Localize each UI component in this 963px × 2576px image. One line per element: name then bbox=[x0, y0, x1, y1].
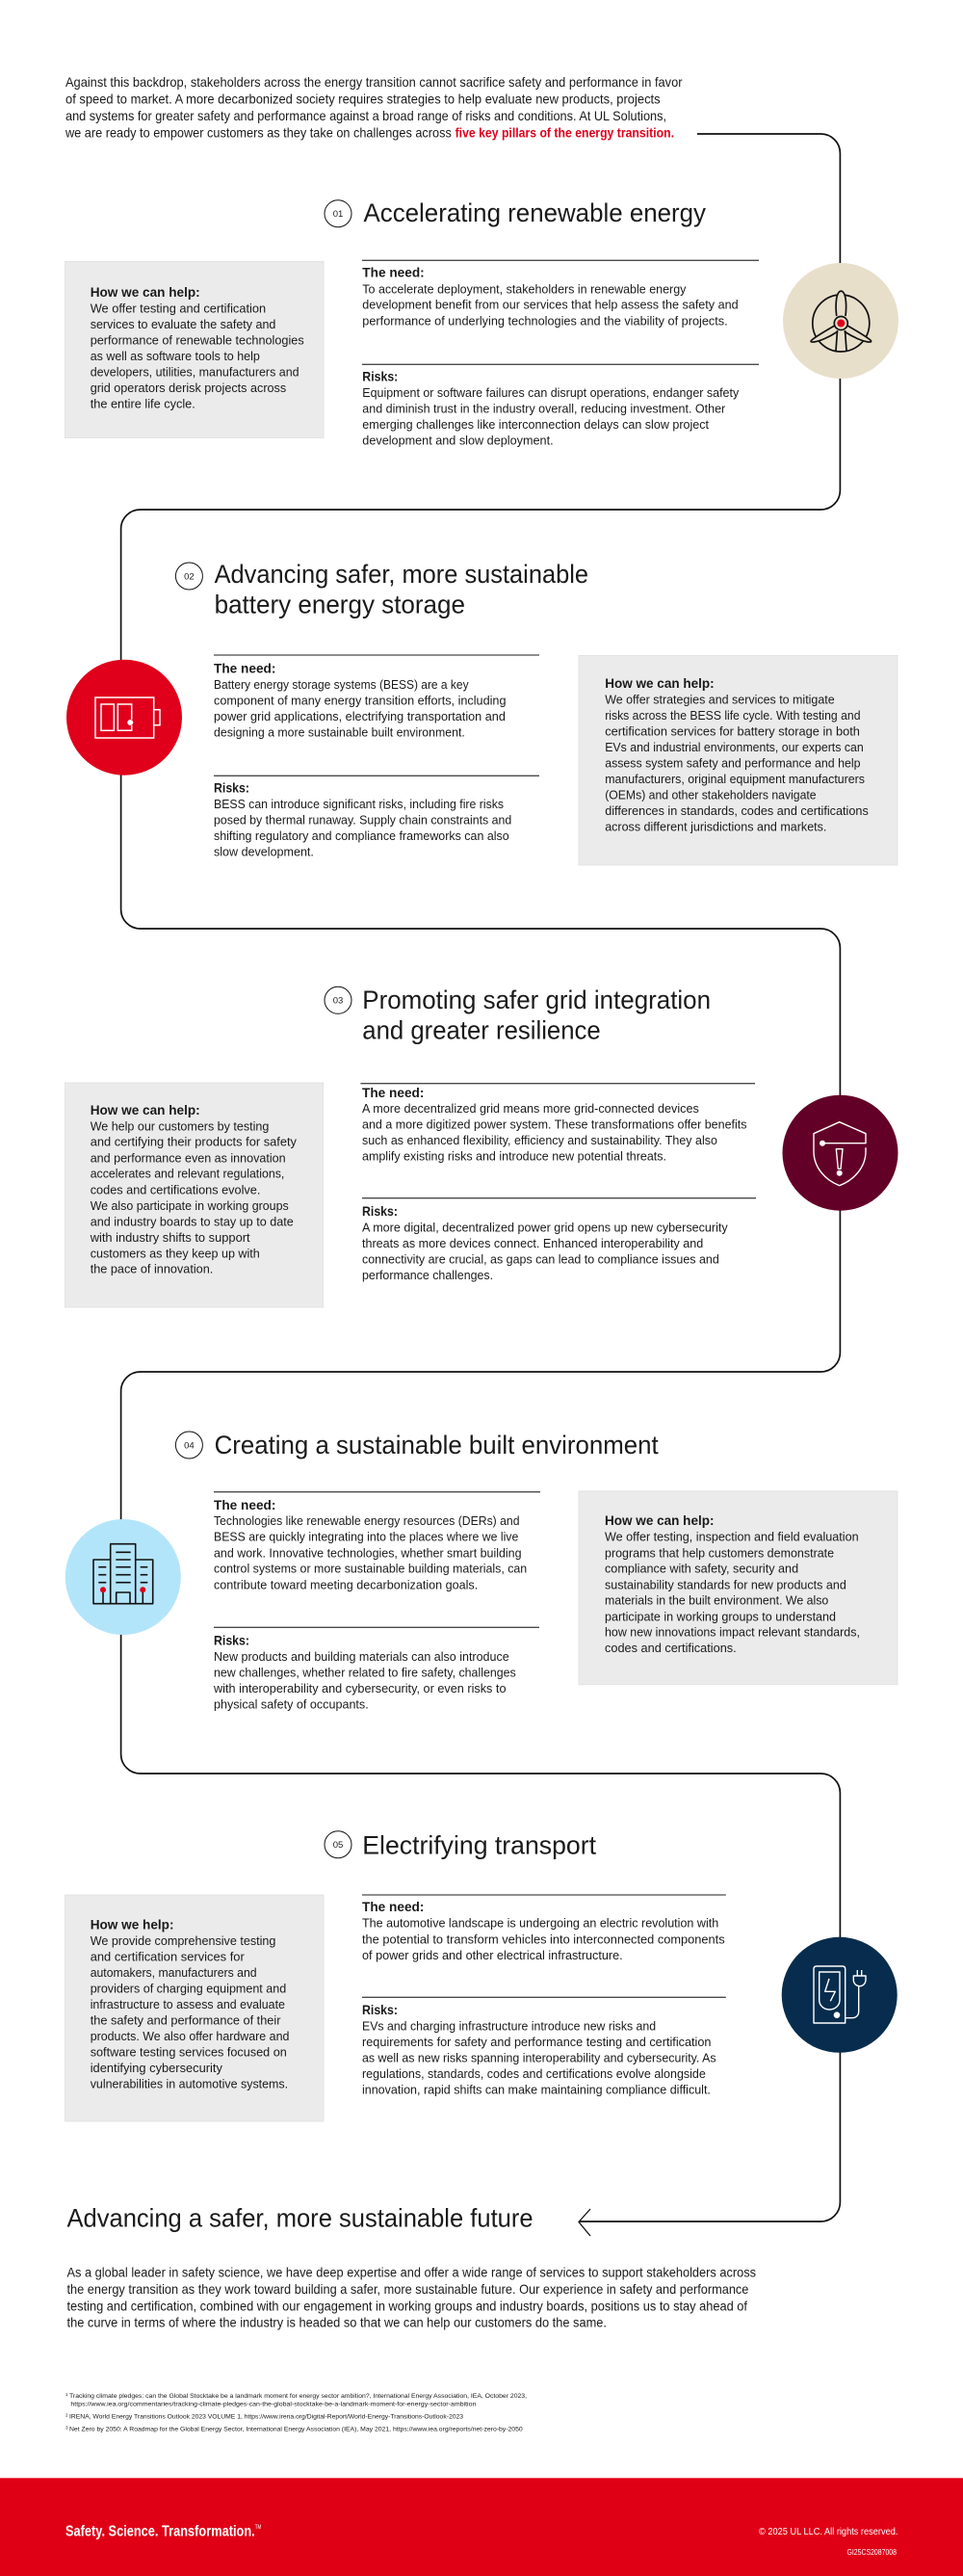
tagline: TM bbox=[255, 2524, 261, 2531]
panel: how we help 5: products. We also offer hardware and bbox=[91, 2029, 289, 2043]
intro paragraph: Against this backdrop, stakeholders across the energy transition cannot sacrifice safety and performance in favor bbox=[65, 74, 683, 90]
the need 2: Battery energy storage systems (BESS) are a key bbox=[214, 677, 469, 692]
the need 4: BESS are quickly integrating into the places where we live bbox=[214, 1530, 518, 1544]
the need 4: and work. Innovative technologies, whether smart building bbox=[214, 1545, 522, 1560]
tagline: Safety. Science. Transformation. bbox=[65, 2524, 255, 2539]
the need 5: the potential to transform vehicles into interconnected components bbox=[362, 1932, 725, 1946]
panel: how we can help 2: differences in standards, codes and certifications bbox=[605, 803, 869, 818]
risks 5: requirements for safety and performance testing and certification bbox=[362, 2035, 711, 2049]
number badge 02: 02 bbox=[184, 571, 195, 582]
conclusion paragraph: testing and certification, combined with our engagement in working groups and industry boards, positions us to stay ahead of bbox=[67, 2298, 747, 2313]
icon: battery bbox=[66, 660, 182, 775]
footnotes bbox=[65, 2392, 527, 2433]
panel: how we help 5: infrastructure to assess and evaluate bbox=[91, 1997, 285, 2011]
panel: how we can help 3: We help our customers by testing bbox=[91, 1118, 269, 1133]
panel: how we can help 2: assess system safety and performance and help bbox=[605, 756, 861, 771]
panel: how we help 5: We provide comprehensive testing bbox=[91, 1933, 275, 1948]
risks 4: New products and building materials can also introduce bbox=[214, 1649, 509, 1664]
the need 3: amplify existing risks and introduce new potential threats. bbox=[362, 1149, 666, 1164]
panel: how we can help 3: and certifying their products for safety bbox=[91, 1135, 297, 1149]
risks 3: A more digital, decentralized power grid opens up new cybersecurity bbox=[362, 1220, 728, 1234]
risks 2 bbox=[214, 775, 539, 859]
footnotes: 1 bbox=[65, 2392, 68, 2397]
heading 2: battery energy storage bbox=[215, 590, 465, 618]
icon: EV charger bbox=[782, 1937, 898, 2053]
panel: how we can help 3: codes and certifications evolve. bbox=[91, 1182, 260, 1196]
heading 1: Accelerating renewable energy bbox=[364, 198, 706, 227]
conclusion heading: Advancing a safer, more sustainable future bbox=[67, 2204, 534, 2233]
risks 5: innovation, rapid shifts can make maintaining compliance difficult. bbox=[362, 2083, 711, 2097]
section 1: accelerating renewable energy bbox=[65, 198, 898, 447]
footnotes: Tracking climate pledges: can the Global Stocktake be a landmark moment for energy sector ambition?, International Energy Association, IEA, October 2023, bbox=[69, 2393, 527, 2400]
risks 5: regulations, standards, codes and certifications evolve alongside bbox=[362, 2066, 706, 2081]
the need 1 bbox=[362, 260, 759, 328]
risks 4: new challenges, whether related to fire safety, challenges bbox=[214, 1665, 516, 1679]
risks 5 bbox=[362, 1997, 726, 2097]
section 2: battery energy storage bbox=[66, 560, 898, 865]
the need 2 bbox=[214, 655, 539, 740]
risks 3: threats as more devices connect. Enhanced interoperability and bbox=[362, 1236, 703, 1250]
panel: how we can help 4: participate in working groups to understand bbox=[605, 1609, 836, 1623]
the need 2: The need: bbox=[214, 661, 275, 676]
panel: how we help 5: the safety and performance of their bbox=[91, 2013, 281, 2028]
the need 4: control systems or more sustainable building materials, can bbox=[214, 1562, 527, 1576]
panel: how we can help 1: developers, utilities, manufacturers and bbox=[91, 364, 299, 379]
panel: how we can help 2: We offer strategies and services to mitigate bbox=[605, 693, 835, 707]
panel: how we can help 4: codes and certifications. bbox=[605, 1641, 737, 1655]
footnotes: Net Zero by 2050: A Roadmap for the Global Energy Sector, International Energy Association (IEA), May 2021, https://www.iea.org/reports/net-zero-by-2050 bbox=[69, 2427, 523, 2433]
risks 2: Risks: bbox=[214, 780, 249, 796]
the need 5 bbox=[362, 1895, 726, 1962]
risks 4: Risks: bbox=[214, 1632, 249, 1647]
footnotes: https://www.iea.org/commentaries/tracking-climate-pledges-can-the-global-stocktake-be-a-landmark-moment-for-energy-sector-ambition bbox=[70, 2402, 477, 2408]
panel: how we can help 2: manufacturers, original equipment manufacturers bbox=[605, 772, 865, 786]
panel: how we help 5: automakers, manufacturers and bbox=[91, 1965, 257, 1980]
risks 4: physical safety of occupants. bbox=[214, 1696, 369, 1711]
panel: how we can help 1: We offer testing and certification bbox=[91, 301, 266, 315]
icon: shield with alert bbox=[782, 1095, 898, 1211]
panel: how we can help 4: compliance with safety, security and bbox=[605, 1562, 798, 1576]
document code: GI25CS2087008 bbox=[847, 2548, 897, 2557]
the need 3: and a more digitized power system. These transformations offer benefits bbox=[362, 1117, 747, 1132]
risks 3: Risks: bbox=[362, 1203, 398, 1219]
risks 3 bbox=[362, 1198, 756, 1282]
panel: how we can help 3: customers as they keep up with bbox=[91, 1246, 260, 1260]
panel: how we can help 3: accelerates and relevant regulations, bbox=[91, 1167, 284, 1181]
conclusion paragraph: the curve in terms of where the industry is headed so that we can help our customers do the same. bbox=[67, 2315, 607, 2330]
panel: how we can help 1: as well as software tools to help bbox=[91, 349, 260, 363]
panel: how we can help 3: and performance even as innovation bbox=[91, 1150, 286, 1165]
the need 3: such as enhanced flexibility, efficiency and sustainability. They also bbox=[362, 1133, 717, 1147]
icon: buildings bbox=[65, 1519, 181, 1635]
number badge 04: 04 bbox=[184, 1440, 195, 1451]
the need 4: Technologies like renewable energy resources (DERs) and bbox=[214, 1513, 520, 1528]
the need 5: The need: bbox=[362, 1899, 424, 1914]
panel: how we can help 1: the entire life cycle. bbox=[91, 396, 195, 410]
risks 1: and diminish trust in the industry overall, reducing investment. Other bbox=[362, 401, 726, 415]
the need 4: The need: bbox=[214, 1497, 275, 1512]
panel: how we can help 2: risks across the BESS life cycle. With testing and bbox=[605, 708, 861, 723]
intro paragraph: and systems for greater safety and performance against a broad range of risks and conditions. At UL Solutions, bbox=[65, 108, 666, 123]
connecting journey line with arrow bbox=[121, 134, 840, 2236]
panel: how we can help 3: We also participate in working groups bbox=[91, 1198, 289, 1213]
number badge 02 bbox=[175, 563, 202, 590]
panel: how we help 5: providers of charging equipment and bbox=[91, 1982, 286, 1996]
risks 2: slow development. bbox=[214, 845, 314, 859]
icon: wind turbine bbox=[783, 263, 898, 379]
risks 1: Equipment or software failures can disrupt operations, endanger safety bbox=[362, 385, 740, 400]
panel: how we can help 2: (OEMs) and other stakeholders navigate bbox=[605, 788, 817, 802]
panel: how we can help 1 bbox=[65, 262, 324, 437]
the need 1: development benefit from our services that help assess the safety and bbox=[362, 298, 739, 312]
heading 5: Electrifying transport bbox=[362, 1830, 596, 1859]
panel: how we can help 2 bbox=[579, 655, 898, 865]
risks 1 bbox=[362, 364, 759, 447]
the need 4: contribute toward meeting decarbonization goals. bbox=[214, 1577, 478, 1591]
copyright: © 2025 UL LLC. All rights reserved. bbox=[759, 2526, 898, 2537]
panel: how we help 5: identifying cybersecurity bbox=[91, 2061, 222, 2075]
risks 5: EVs and charging infrastructure introduce new risks and bbox=[362, 2019, 656, 2034]
number badge 05 bbox=[325, 1831, 351, 1858]
heading 2 bbox=[215, 560, 588, 618]
number badge 03 bbox=[325, 986, 351, 1013]
section 5: electrifying transport bbox=[65, 1830, 898, 2121]
footnotes: IRENA, World Energy Transitions Outlook 2023 VOLUME 1, https://www.irena.org/Digital-Report/World-Energy-Transitions-Outlook-2023 bbox=[69, 2414, 463, 2421]
risks 3: performance challenges. bbox=[362, 1268, 493, 1282]
panel: how we can help 2: across different jurisdictions and markets. bbox=[605, 819, 826, 833]
intro paragraph: we are ready to empower customers as they take on challenges across bbox=[65, 125, 452, 141]
intro paragraph: of speed to market. A more decarbonized society requires strategies to help evaluate new products, projects bbox=[65, 91, 661, 106]
panel: how we can help 4: programs that help customers demonstrate bbox=[605, 1545, 834, 1560]
intro paragraph bbox=[65, 74, 683, 141]
panel: how we help 5: and certification services for bbox=[91, 1949, 245, 1963]
the need 1: The need: bbox=[362, 264, 425, 279]
panel: how we help 5 bbox=[65, 1895, 324, 2121]
panel: how we can help 2: How we can help: bbox=[605, 675, 715, 691]
risks 4 bbox=[213, 1627, 539, 1711]
panel: how we help 5: vulnerabilities in automotive systems. bbox=[91, 2077, 288, 2091]
the need 3: A more decentralized grid means more grid-connected devices bbox=[362, 1101, 699, 1116]
the need 2: designing a more sustainable built environment. bbox=[214, 725, 465, 740]
panel: how we can help 4: materials in the built environment. We also bbox=[605, 1593, 828, 1608]
panel: how we can help 4: How we can help: bbox=[605, 1512, 715, 1528]
footnotes: 3 bbox=[65, 2426, 68, 2430]
heading 2: Advancing safer, more sustainable bbox=[215, 560, 588, 589]
intro paragraph: five key pillars of the energy transition. bbox=[455, 125, 674, 141]
the need 4 bbox=[214, 1492, 540, 1591]
risks 1: Risks: bbox=[362, 368, 398, 383]
panel: how we can help 3: and industry boards to stay up to date bbox=[91, 1214, 294, 1228]
risks 3: connectivity are crucial, as gaps can lead to compliance issues and bbox=[362, 1251, 719, 1266]
heading 3: Promoting safer grid integration bbox=[362, 986, 711, 1014]
risks 5: Risks: bbox=[362, 2002, 398, 2017]
panel: how we can help 3: with industry shifts to support bbox=[90, 1230, 250, 1245]
panel: how we can help 3: How we can help: bbox=[91, 1102, 200, 1117]
panel: how we can help 4 bbox=[579, 1491, 898, 1685]
panel: how we can help 4: sustainability standards for new products and bbox=[605, 1577, 846, 1591]
panel: how we help 5: software testing services focused on bbox=[91, 2045, 287, 2060]
risks 2: posed by thermal runaway. Supply chain constraints and bbox=[214, 813, 511, 828]
number badge 01 bbox=[325, 200, 351, 227]
risks 4: with interoperability and cybersecurity, or even risks to bbox=[213, 1681, 507, 1695]
the need 1: To accelerate deployment, stakeholders in renewable energy bbox=[362, 281, 687, 296]
section 3: grid integration bbox=[65, 986, 898, 1307]
panel: how we can help 1: services to evaluate the safety and bbox=[91, 317, 275, 331]
heading 4: Creating a sustainable built environment bbox=[215, 1431, 659, 1459]
risks 5: as well as new risks spanning interoperability and cybersecurity. As bbox=[362, 2051, 716, 2065]
section 4: built environment bbox=[65, 1431, 898, 1711]
conclusion paragraph: As a global leader in safety science, we have deep expertise and offer a wide range of services to support stakeholders across bbox=[67, 2264, 756, 2279]
the need 5: of power grids and other electrical infrastructure. bbox=[362, 1948, 623, 1962]
panel: how we can help 2: EVs and industrial environments, our experts can bbox=[605, 740, 864, 754]
panel: how we can help 2: certification services for battery storage in both bbox=[605, 724, 860, 739]
risks 2: BESS can introduce significant risks, including fire risks bbox=[214, 797, 504, 811]
panel: how we can help 3: the pace of innovation. bbox=[91, 1262, 213, 1276]
heading 3 bbox=[362, 986, 711, 1044]
panel: how we help 5: How we help: bbox=[91, 1917, 173, 1932]
conclusion paragraph: the energy transition as they work toward building a safer, more sustainable future. Our experience in safety and performance bbox=[67, 2281, 749, 2297]
panel: how we can help 4: We offer testing, inspection and field evaluation bbox=[605, 1530, 859, 1544]
number badge 03: 03 bbox=[333, 996, 343, 1007]
number badge 04 bbox=[175, 1432, 202, 1459]
number badge 01: 01 bbox=[333, 209, 343, 220]
panel: how we can help 4: how new innovations impact relevant standards, bbox=[605, 1625, 860, 1640]
the need 2: power grid applications, electrifying transportation and bbox=[214, 709, 506, 723]
footer band bbox=[0, 2478, 963, 2576]
conclusion paragraph bbox=[67, 2264, 756, 2330]
risks 1: emerging challenges like interconnection delays can slow project bbox=[362, 417, 709, 432]
heading 3: and greater resilience bbox=[362, 1015, 601, 1044]
footnotes: 2 bbox=[65, 2412, 68, 2418]
the need 2: component of many energy transition efforts, including bbox=[214, 693, 507, 707]
panel: how we can help 1: grid operators derisk projects across bbox=[91, 381, 287, 395]
the need 3: The need: bbox=[362, 1085, 424, 1100]
panel: how we can help 1: performance of renewable technologies bbox=[91, 332, 304, 347]
panel: how we can help 1: How we can help: bbox=[91, 284, 200, 300]
risks 1: development and slow deployment. bbox=[362, 433, 554, 447]
number badge 05: 05 bbox=[333, 1840, 343, 1851]
the need 1: performance of underlying technologies and the viability of projects. bbox=[362, 313, 728, 328]
the need 5: The automotive landscape is undergoing an electric revolution with bbox=[362, 1916, 718, 1931]
risks 2: shifting regulatory and compliance frameworks can also bbox=[214, 828, 509, 843]
the need 3 bbox=[360, 1084, 755, 1164]
panel: how we can help 3 bbox=[65, 1083, 324, 1307]
